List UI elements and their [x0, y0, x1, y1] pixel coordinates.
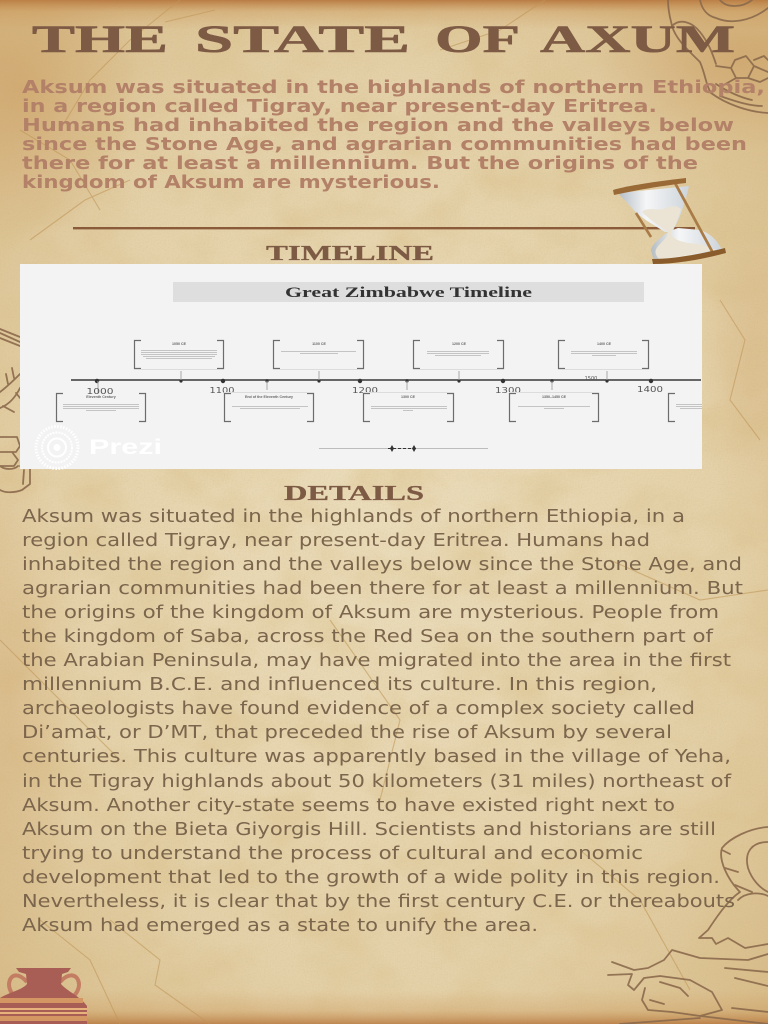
year labels: 1500	[585, 376, 597, 382]
intro paragraph: Aksum was situated in the highlands of northern Ethiopia,	[22, 78, 765, 98]
details paragraph: Aksum had emerged as a state to unify the area.	[22, 916, 538, 936]
year labels: 1200	[352, 386, 378, 395]
details paragraph: Aksum on the Bieta Giyorgis Hill. Scientists and historians are still	[22, 820, 716, 840]
intro paragraph: since the Stone Age, and agrarian communities had been	[22, 135, 747, 155]
title: THE	[32, 18, 168, 61]
details paragraph: the Arabian Peninsula, may have migrated into the area in the first	[22, 651, 731, 671]
ornament: bottom right creature line art	[608, 827, 768, 1024]
details paragraph: inhabited the region and the valleys below since the Stone Age, and	[22, 555, 742, 575]
details paragraph: Di’amat, or D’MT, that preceded the rise of Aksum by several	[22, 723, 672, 743]
year labels: 1100	[210, 386, 234, 395]
upper event cards: 1100 CE	[312, 342, 326, 346]
details paragraph: Aksum. Another city-state seems to have existed right next to	[22, 796, 675, 816]
details paragraph: trying to understand the process of cultural and economic	[22, 844, 643, 864]
ornament: left edge creature fragments	[0, 329, 30, 492]
lower event cards: 1350–1450 CE	[542, 395, 567, 399]
details paragraph: in the Tigray highlands about 50 kilometers (31 miles) northeast of	[22, 772, 732, 792]
details paragraph: region called Tigray, near present-day Eritrea. Humans had	[22, 531, 650, 551]
year labels: 1000	[86, 387, 114, 396]
icon: hourglass	[613, 178, 726, 264]
details paragraph: the kingdom of Saba, across the Red Sea on the southern part of	[22, 627, 714, 647]
details paragraph: millennium B.C.E. and influenced its culture. In this region,	[22, 675, 657, 695]
ornament: top right creature line art	[668, 0, 768, 113]
ornament: clay jar	[0, 968, 87, 1024]
intro paragraph: Humans had inhabited the region and the valleys below	[22, 116, 734, 136]
details paragraph: Aksum was situated in the highlands of northern Ethiopia, in a	[22, 507, 685, 527]
page navigation ornament	[319, 445, 488, 452]
heading: timeline: TIMELINE	[266, 241, 434, 265]
intro paragraph: there for at least a millennium. But the origins of the	[22, 154, 698, 174]
heading: details: DETAILS	[284, 481, 424, 505]
title: AXUM	[540, 18, 735, 61]
title	[32, 18, 735, 61]
upper event cards: 1050 CE	[172, 342, 187, 346]
details paragraph	[22, 507, 743, 936]
details paragraph: the origins of the kingdom of Aksum are mysterious. People from	[22, 603, 719, 623]
details paragraph: archaeologists have found evidence of a complex society called	[22, 699, 695, 719]
Prezi watermark: Prezi	[89, 436, 162, 459]
timeline title bar	[173, 282, 644, 302]
details paragraph: development that led to the growth of a wide polity in this region.	[22, 868, 720, 888]
lower event cards: 1300 CE	[401, 395, 416, 399]
timeline axis	[71, 371, 701, 393]
panel: timeline image	[20, 264, 702, 469]
upper event cards: 1200 CE	[452, 342, 467, 346]
timeline title: Great Zimbabwe Timeline	[285, 285, 532, 301]
upper event cards	[134, 340, 649, 370]
Prezi watermark	[36, 426, 162, 468]
title: STATE	[195, 18, 410, 61]
year labels: 1300	[495, 386, 521, 395]
upper event cards: 1400 CE	[597, 342, 612, 346]
divider line	[73, 227, 695, 229]
intro paragraph	[22, 78, 765, 193]
details paragraph: Nevertheless, it is clear that by the first century C.E. or thereabouts	[22, 892, 735, 912]
details paragraph: agrarian communities had been there for at least a millennium. But	[22, 579, 743, 599]
year labels: 1400	[637, 385, 663, 394]
details paragraph: centuries. This culture was apparently based in the village of Yeha,	[22, 747, 731, 767]
lower event cards: End of the Eleventh Century	[245, 395, 293, 399]
lower event cards: Eleventh Century	[86, 395, 116, 399]
title: OF	[435, 18, 520, 61]
lower event cards	[56, 392, 702, 422]
intro paragraph: kingdom of Aksum are mysterious.	[22, 173, 440, 193]
year labels	[86, 376, 663, 396]
intro paragraph: in a region called Tigray, near present-day Eritrea.	[22, 97, 657, 117]
